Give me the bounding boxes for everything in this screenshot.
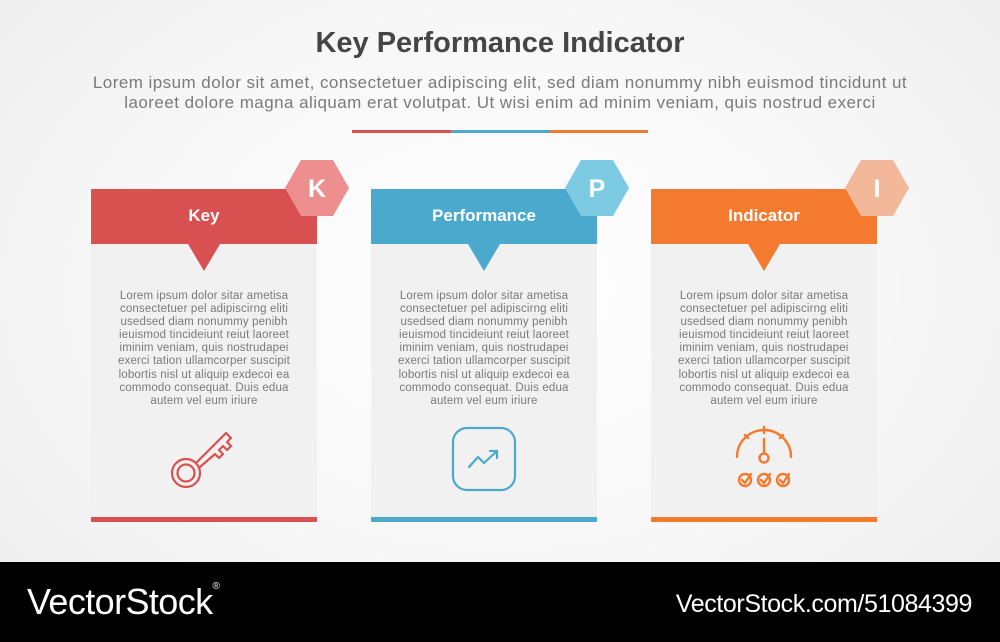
text: Key: ieuismod tincideiunt reiut laoreet: [119, 329, 289, 341]
hexagon P: P: [589, 175, 605, 203]
text: Indicator: Lorem ipsum dolor sitar ametisa: [680, 290, 848, 302]
title: Key Performance Indicator: [315, 27, 685, 59]
hexagon P: [565, 160, 629, 216]
icon: growth chart: [452, 426, 516, 492]
text: Performance: iminim veniam, quis nostrudapei: [400, 342, 568, 354]
header: Indicator: [651, 189, 877, 244]
header: Performance: [371, 189, 597, 244]
card: Key: [91, 160, 349, 522]
subtitle: Lorem ipsum dolor sit amet, consectetuer adipiscing elit, sed diam nonummy nibh euismod tincidunt ut: [93, 73, 907, 92]
text: Key: Lorem ipsum dolor sitar ametisa: [120, 290, 288, 302]
text: Performance: autem vel eum iriure: [430, 395, 538, 407]
subtitle: [93, 73, 907, 112]
text: Performance: usedsed diam nonummy penibh: [400, 316, 568, 328]
footer url: VectorStock.com/51084399: [676, 590, 972, 618]
footer: [0, 562, 1000, 642]
header: Key: [91, 189, 317, 244]
text: Performance: consectetuer pel adipiscirng eliti: [400, 303, 568, 315]
text: Key: exerci tation ullamcorper suscipit: [118, 355, 290, 367]
text: Indicator: commodo consequat. Duis edua: [679, 382, 849, 394]
text: Key: usedsed diam nonummy penibh: [120, 316, 288, 328]
header: Indicator: Indicator: [728, 206, 800, 225]
text: Indicator: [678, 290, 850, 407]
text: Indicator: iminim veniam, quis nostrudapei: [680, 342, 848, 354]
text: Performance: lobortis nisl ut aliquip exdecoi ea: [399, 369, 569, 381]
hexagon K: [285, 160, 349, 216]
text: Key: consectetuer pel adipiscirng eliti: [120, 303, 288, 315]
text: Performance: ieuismod tincideiunt reiut laoreet: [399, 329, 569, 341]
text: Performance: exerci tation ullamcorper suscipit: [398, 355, 570, 367]
text: Indicator: ieuismod tincideiunt reiut laoreet: [679, 329, 849, 341]
text: Key: lobortis nisl ut aliquip exdecoi ea: [119, 369, 289, 381]
text: Indicator: consectetuer pel adipiscirng eliti: [680, 303, 848, 315]
hexagon K: K: [308, 175, 326, 203]
header: Performance: Performance: [432, 206, 536, 225]
text: Indicator: usedsed diam nonummy penibh: [680, 316, 848, 328]
hexagon I: I: [874, 175, 880, 203]
header: Key: Key: [188, 206, 220, 225]
text: Performance: Lorem ipsum dolor sitar ametisa: [400, 290, 568, 302]
icon: gauge with checks: [736, 426, 792, 488]
text: Key: commodo consequat. Duis edua: [119, 382, 289, 394]
subtitle: laoreet dolore magna aliquam erat volutpat. Ut wisi enim ad minim veniam, quis nostrud exerci: [124, 93, 876, 112]
text: Indicator: exerci tation ullamcorper suscipit: [678, 355, 850, 367]
text: Indicator: autem vel eum iriure: [710, 395, 818, 407]
footer logo: VectorStock®: [27, 581, 219, 622]
text: Performance: [398, 290, 570, 407]
icon: key: [170, 432, 232, 488]
text: Key: iminim veniam, quis nostrudapei: [120, 342, 288, 354]
text: Key: [118, 290, 290, 407]
text: Indicator: lobortis nisl ut aliquip exdecoi ea: [679, 369, 849, 381]
hexagon I: [845, 160, 909, 216]
text: Key: autem vel eum iriure: [150, 395, 258, 407]
card: Indicator: [651, 160, 909, 522]
text: Performance: commodo consequat. Duis edua: [399, 382, 569, 394]
divider lines: [352, 130, 648, 133]
card: Performance: [371, 160, 629, 522]
